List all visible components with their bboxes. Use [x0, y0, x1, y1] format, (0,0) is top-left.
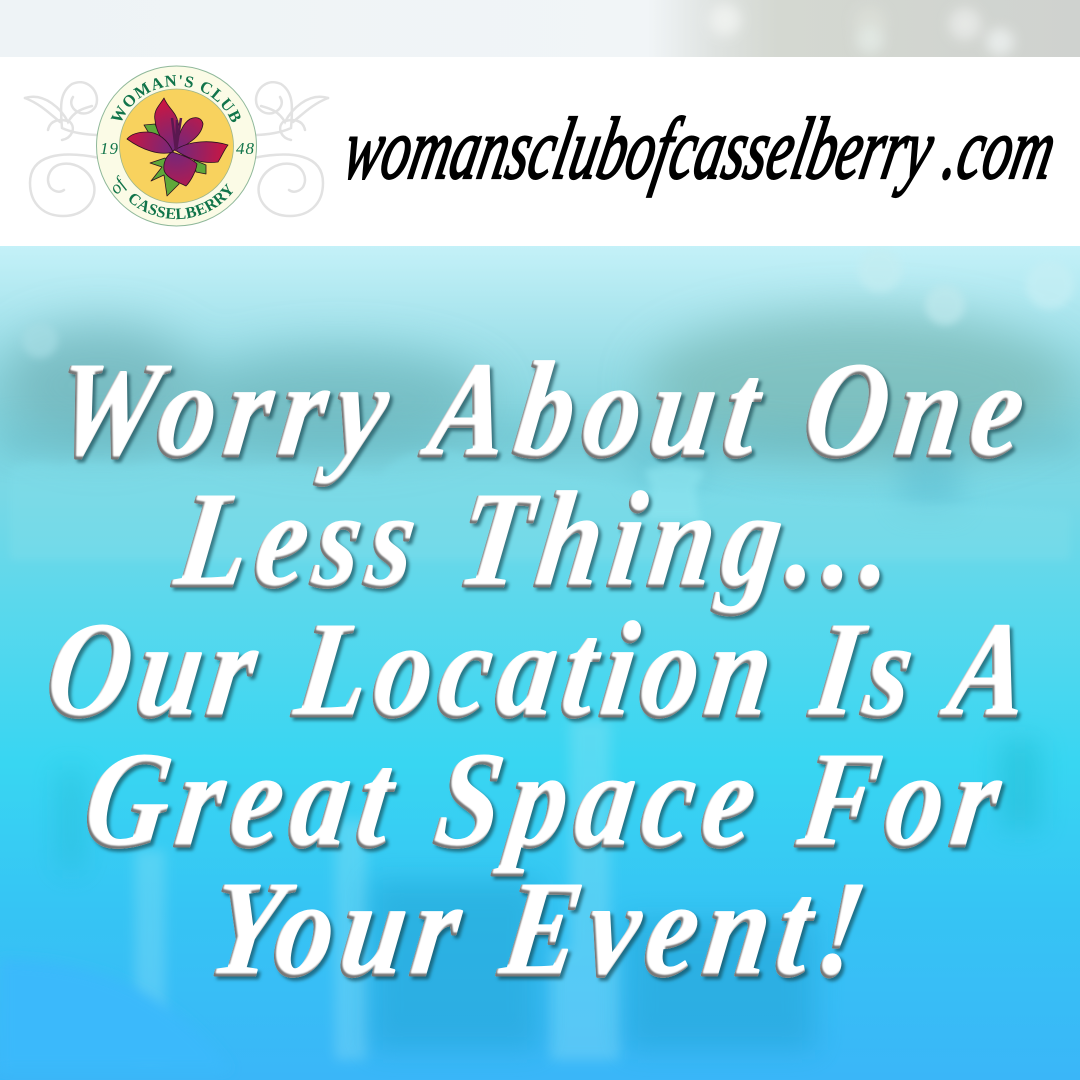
logo: Woman's Club of Casselberry seal	[96, 66, 257, 226]
spindles light	[135, 720, 620, 1060]
headline: Great Space For	[76, 725, 1010, 876]
decorative swirls behind logo	[25, 82, 328, 216]
seal ring text: CASSELBERRY	[129, 183, 234, 220]
top photo strip	[0, 0, 1080, 57]
seal ring text	[100, 75, 255, 220]
blurred chair photo background	[0, 246, 1080, 1080]
chair tops	[10, 450, 1070, 560]
hibiscus flower	[127, 98, 228, 196]
seal ring text: 19	[100, 139, 119, 158]
seal ring text: 48	[236, 139, 255, 158]
spindles dark	[60, 740, 1040, 1050]
foreground pale blob	[0, 960, 230, 1070]
headline: Less Thing...	[167, 465, 903, 616]
white header band	[0, 57, 1080, 246]
headline: Worry About One	[46, 335, 1033, 486]
headline: Your Event!	[201, 854, 873, 1005]
treeline blur	[0, 313, 1075, 457]
seal ring text: of	[105, 172, 131, 198]
seal ring text: WOMAN'S CLUB	[110, 75, 240, 122]
headline: Our Location Is A	[38, 595, 1038, 746]
headline	[38, 335, 1038, 1005]
